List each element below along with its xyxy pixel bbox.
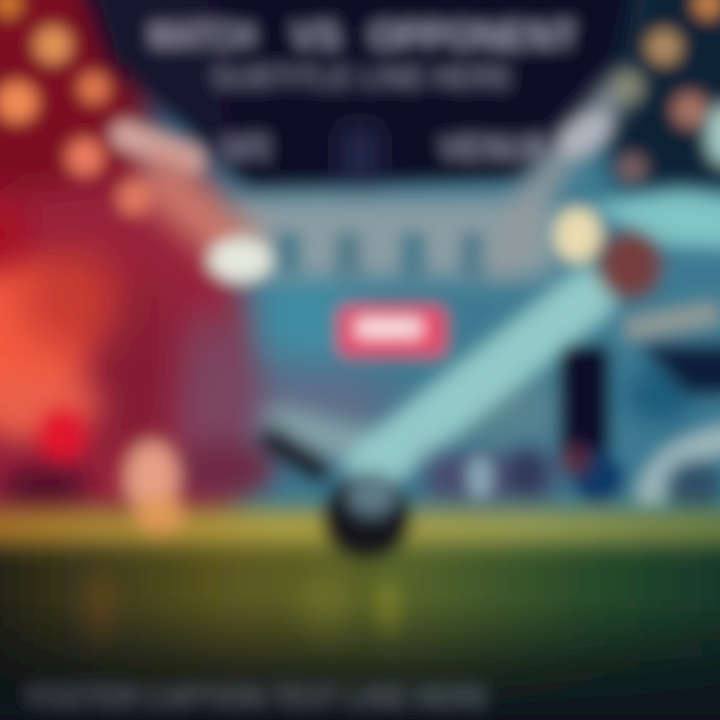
panel: dark teal corner right xyxy=(600,0,720,190)
venue text right: VENUE xyxy=(440,130,550,166)
player: light blue kit and leg xyxy=(282,103,720,465)
diagonal light beam right xyxy=(505,85,625,265)
title text: MATCH xyxy=(150,15,254,56)
pink diagonal light left xyxy=(125,135,272,282)
crowd band xyxy=(425,448,555,500)
red sign xyxy=(338,306,446,356)
second player: dark kit xyxy=(559,345,720,509)
stadium stands band xyxy=(235,198,555,278)
footer text: FOOTER CAPTION TEXT LINE HERE xyxy=(28,681,488,714)
grass pitch xyxy=(0,497,720,720)
peach leg xyxy=(124,440,180,516)
subtitle text: SUBTITLE LINE HERE xyxy=(212,61,512,94)
football xyxy=(272,440,411,559)
title text: OPPONENT xyxy=(370,15,576,56)
title text xyxy=(150,15,576,56)
date text left: DATE xyxy=(222,130,270,166)
bokeh lights right xyxy=(613,0,720,183)
title text: VS xyxy=(292,15,340,56)
bokeh lights xyxy=(0,0,151,215)
panel: red glow left xyxy=(0,0,275,520)
panel: dark title banner xyxy=(70,0,650,190)
